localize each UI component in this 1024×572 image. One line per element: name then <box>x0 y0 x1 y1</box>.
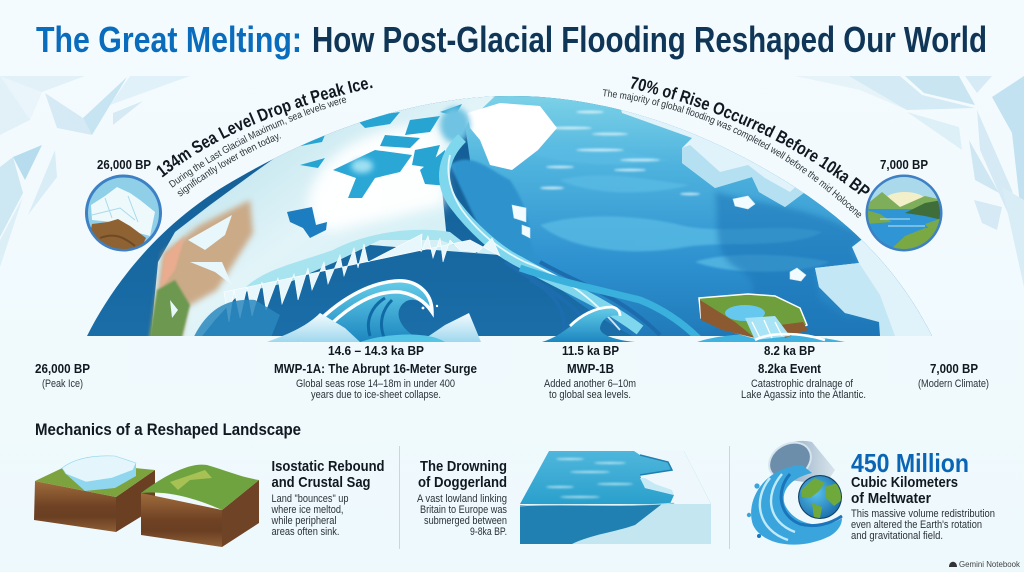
timeline: MWP-1A: MWP-1A: The Abrupt 16-Meter Surge <box>274 361 477 376</box>
timeline: MWP-1A: Global seas rose 14–18m in under 400 <box>296 378 455 390</box>
timeline: 26,000 BP: (Peak Ice) <box>42 378 83 390</box>
annotation: 134m sea level drop: 134m Sea Level Drop at Peak Ice. <box>156 80 373 178</box>
timeline: MWP-1B <box>544 343 636 401</box>
timeline: 8.2ka event: Catastrophic dralnage of <box>751 378 854 390</box>
medallion: 26,000 BP: 26,000 BP <box>97 157 151 172</box>
annotation: 134m sea level drop: significantly lower then today. <box>178 134 281 196</box>
timeline: 8.2ka event: Lake Agassiz into the Atlantic. <box>741 389 866 401</box>
annotation: 70% of rise: 70% of Rise Occurred Before 10ka BP <box>631 76 870 194</box>
isostatic rebound text <box>271 458 384 538</box>
ocean lighter bands <box>541 176 827 272</box>
pink coastal land <box>160 236 185 290</box>
North America ice sheet <box>151 96 498 336</box>
big wave with ice peaks <box>267 281 481 342</box>
isostatic rebound text: and Crustal Sag <box>272 474 370 491</box>
ice shards: top right <box>795 76 1024 287</box>
meltwater stat text: of Meltwater <box>851 490 931 507</box>
Canadian archipelago channels <box>290 104 462 186</box>
timeline: 7,000 BP: (Modern Climate) <box>918 378 989 390</box>
isostatic rebound text: Isostatic Rebound <box>272 458 384 475</box>
medallion: 7,000 BP <box>866 157 942 252</box>
isostatic rebound text: areas often sink. <box>272 526 340 538</box>
globe dome illustration <box>80 80 950 345</box>
doggerland text: 9-8ka BP. <box>470 526 507 538</box>
meltwater stat text: Cubic Kilometers <box>851 474 958 491</box>
drifting icebergs <box>512 196 806 281</box>
meltwater stat text <box>851 448 995 542</box>
timeline: MWP-1B: 11.5 ka BP <box>562 343 619 358</box>
Lake Agassiz drainage block <box>697 294 845 342</box>
ocean darker right basin <box>714 192 861 312</box>
doggerland text: submerged between <box>424 515 507 527</box>
meltwater stat text: This massive volume redistribution <box>851 508 995 520</box>
timeline: MWP-1A <box>274 343 477 401</box>
doggerland text: A vast lowland linking <box>417 493 507 505</box>
ice shards: top left <box>0 76 190 267</box>
timeline: MWP-1B: Added another 6–10m <box>544 378 636 390</box>
gulf water <box>194 300 280 336</box>
doggerland text: The Drowning <box>420 458 507 475</box>
Hudson Bay <box>333 150 412 198</box>
open ocean <box>460 90 940 340</box>
watermark: Gemini Notebook <box>959 559 1021 569</box>
eastern ice shelf faces <box>682 145 895 336</box>
Arctic current <box>445 138 640 330</box>
timeline: 7,000 BP: 7,000 BP <box>930 361 978 376</box>
doggerland text <box>417 458 507 538</box>
title: The Great Melting: <box>36 19 302 60</box>
Greenland <box>467 103 557 170</box>
icicles <box>224 234 500 322</box>
medallion: 7,000 BP: 7,000 BP <box>880 157 928 172</box>
timeline: MWP-1B: to global sea levels. <box>549 389 631 401</box>
exposed land <box>150 200 253 345</box>
icon: bucket pouring water over earth <box>747 435 842 545</box>
crustal blocks diagram <box>34 456 259 547</box>
section heading: Mechanics of a Reshaped Landscape <box>35 420 301 439</box>
doggerland text: of Doggerland <box>418 474 507 491</box>
meltwater stat text: even altered the Earth's rotation <box>851 519 982 531</box>
southern ice margin <box>240 230 477 293</box>
green lowlands <box>148 280 190 345</box>
ocean highlights <box>540 106 700 195</box>
doggerland text: Britain to Europe was <box>420 504 507 516</box>
medallion: 26,000 BP <box>86 157 160 250</box>
timeline: 8.2ka event <box>741 343 866 401</box>
meltwater stat text: and gravitational field. <box>851 530 943 542</box>
meltwater stat text: 450 Million <box>851 448 969 478</box>
doggerland flooded block <box>520 451 711 544</box>
Baffin icy glow <box>440 107 470 143</box>
timeline: 8.2ka event: 8.2ka Event <box>758 361 822 376</box>
small wave MWP-1B <box>542 307 635 342</box>
ice streaks over land <box>170 215 232 318</box>
isostatic rebound text: while peripheral <box>271 515 336 527</box>
isostatic rebound text: Land "bounces" up <box>272 493 348 505</box>
annotation: 134m sea level drop: During the Last Glacial Maximum, sea levels were <box>168 98 346 188</box>
title <box>36 19 987 60</box>
Baffin basin <box>450 158 528 250</box>
Great Lakes <box>287 207 327 238</box>
timeline: MWP-1A: 14.6 – 14.3 ka BP <box>328 343 424 358</box>
timeline: 8.2ka event: 8.2 ka BP <box>764 343 815 358</box>
timeline: 26,000 BP: 26,000 BP <box>35 361 90 376</box>
white central ice <box>308 126 445 232</box>
eastern ice sheet <box>621 110 932 336</box>
timeline: 26,000 BP <box>35 361 90 390</box>
timeline: MWP-1A: years due to ice-sheet collapse. <box>311 389 441 401</box>
timeline: MWP-1B: MWP-1B <box>567 361 614 376</box>
timeline: 7,000 BP <box>918 361 989 390</box>
isostatic rebound text: where ice meltod, <box>271 504 344 516</box>
